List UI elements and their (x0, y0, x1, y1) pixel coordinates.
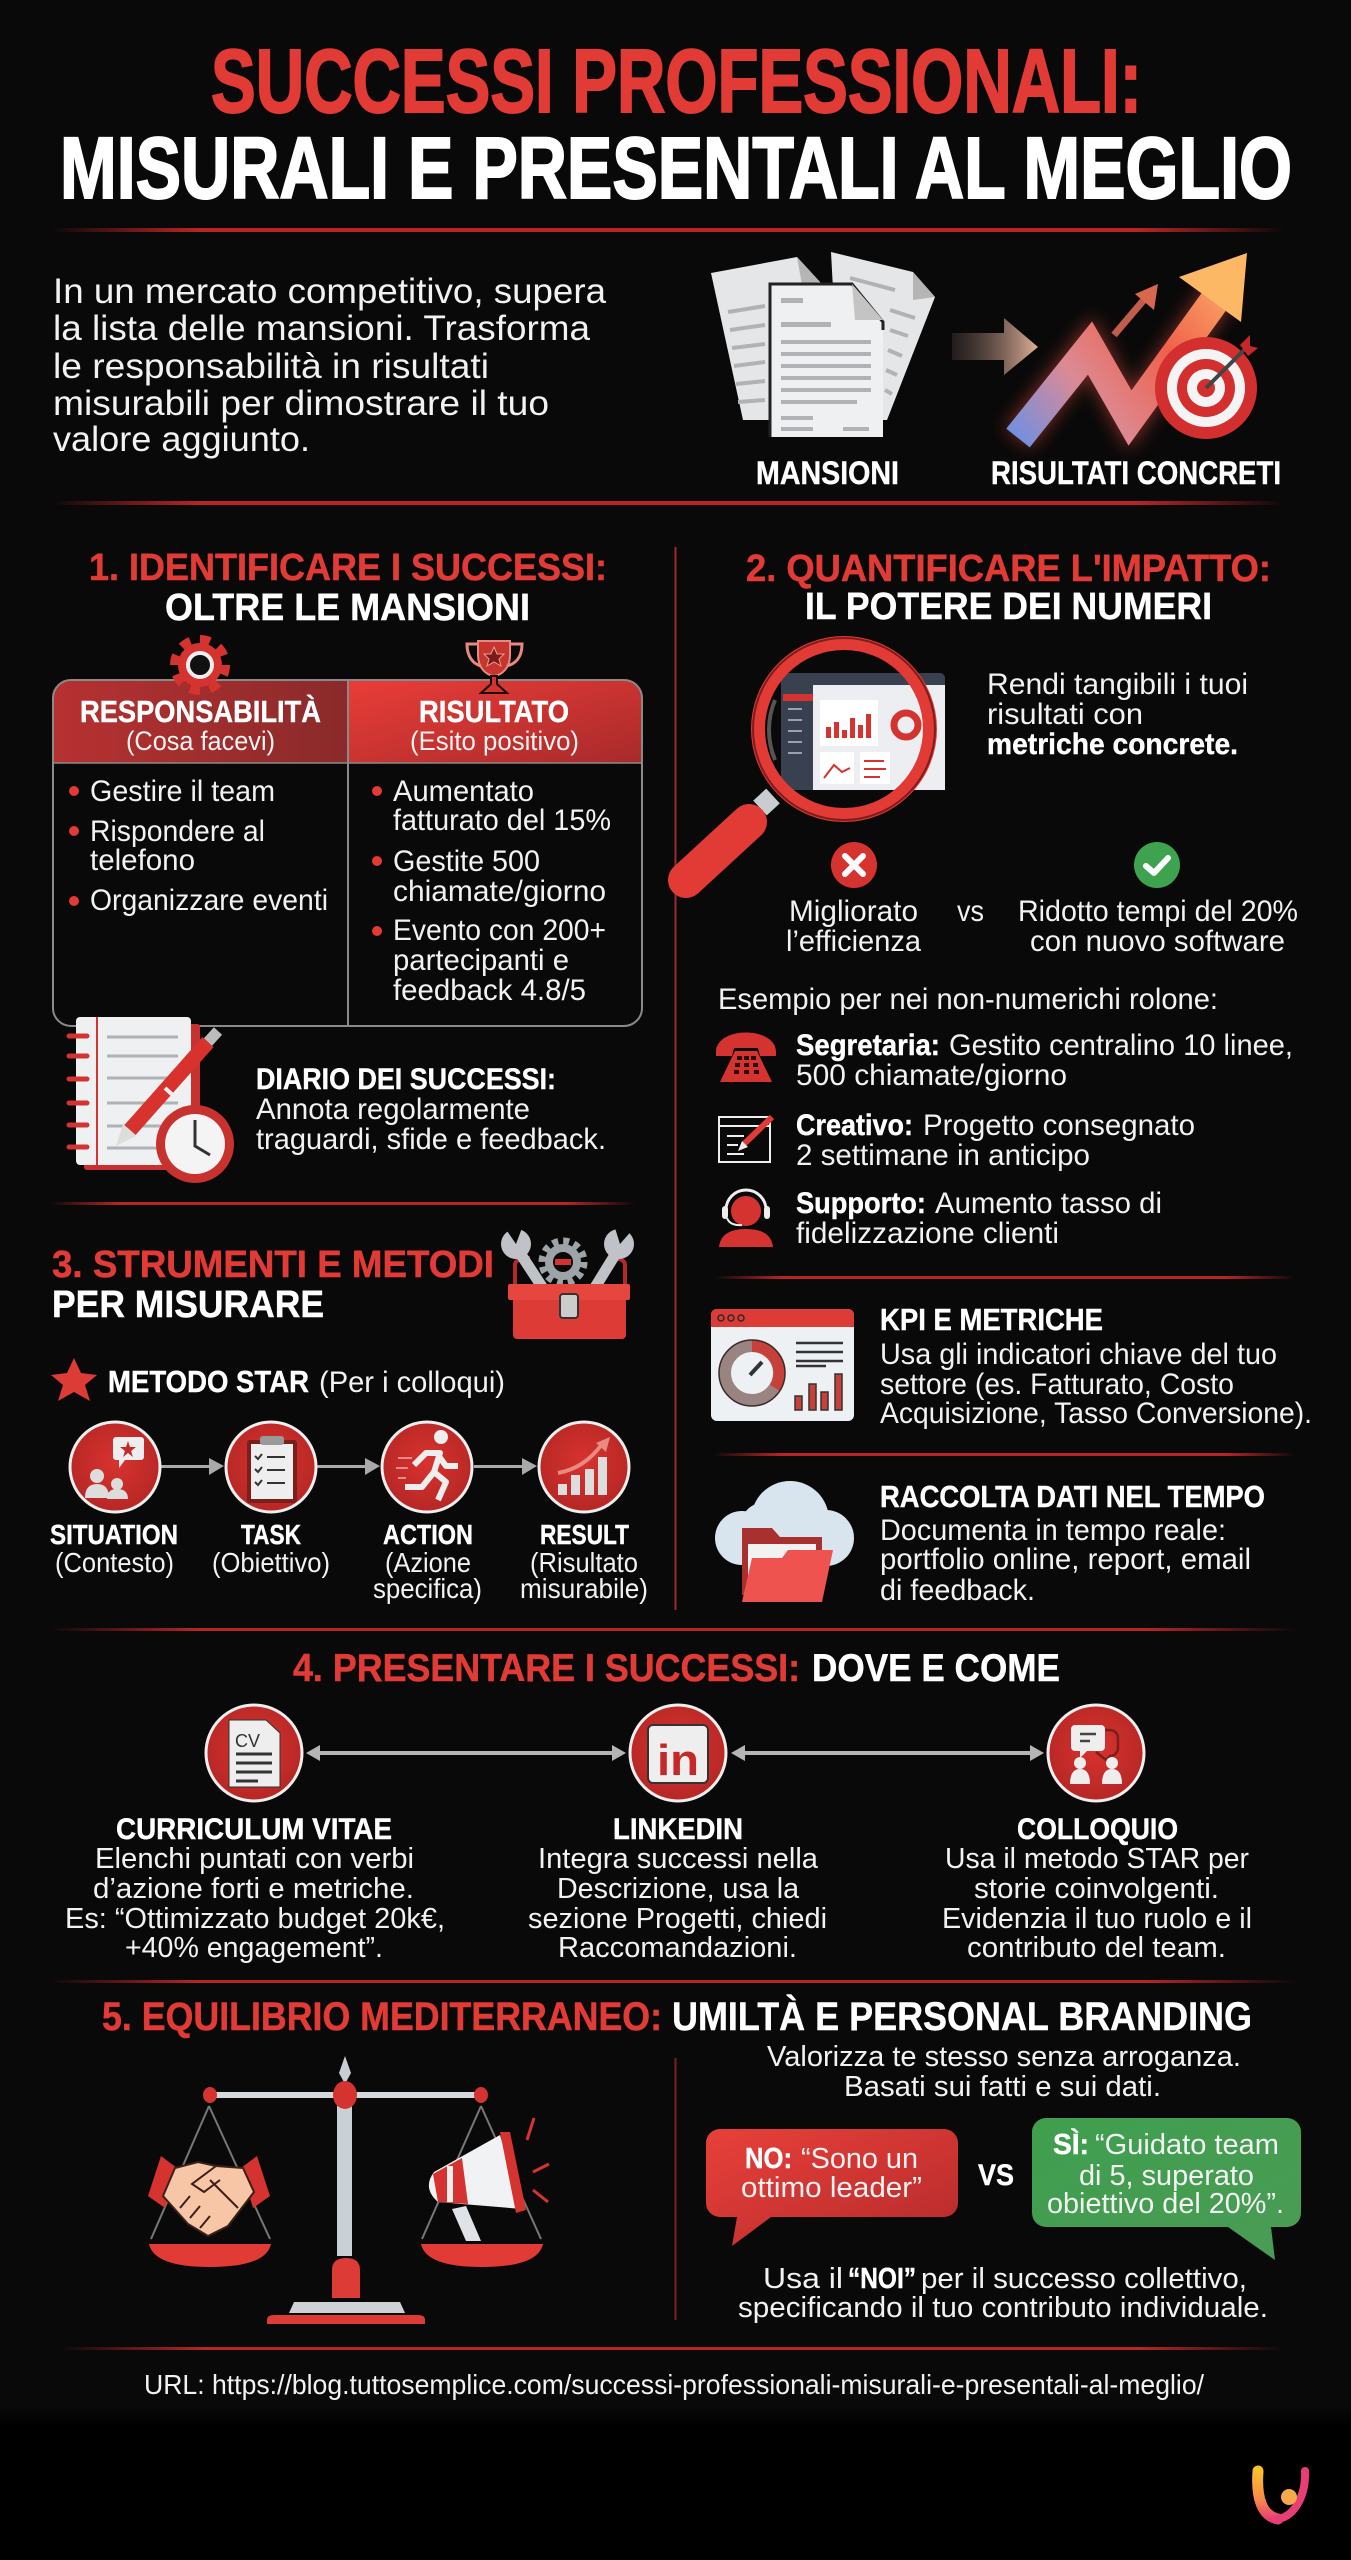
heading: section 3: PER MISURARE (52, 1284, 324, 1326)
text: creativo (796, 1109, 1195, 1172)
callout: NO example: ottimo leader” (741, 2172, 922, 2204)
text: segretaria: 500 chiamate/giorno (796, 1059, 1067, 1092)
step: action (382, 1422, 472, 1512)
arrow: from duties to results (952, 318, 1038, 375)
labels: STAR steps: ACTION (383, 1519, 473, 1550)
text: colloquio: Usa il metodo STAR per (945, 1843, 1249, 1875)
icon: magnifier on dashboard (686, 638, 945, 880)
text: rendi tangibili: Rendi tangibili i tuoi (987, 668, 1248, 701)
comparison: bad vs good example: Migliorato (789, 895, 918, 928)
table: responsabilità vs risultato: telefono (90, 844, 195, 877)
labels: STAR steps: TASK (241, 1519, 301, 1550)
step: situation (70, 1422, 160, 1512)
icon: logo (1258, 2471, 1305, 2519)
icon: creative window with pen (719, 1117, 772, 1162)
text: KPI e metriche: Usa gli indicatori chiave del tuo (880, 1338, 1277, 1371)
text: usa il noi: specificando il tuo contributo individuale. (738, 2292, 1268, 2324)
text: creativo: 2 settimane in anticipo (796, 1139, 1090, 1172)
text: colloquio (942, 1813, 1252, 1964)
text: linkedin: sezione Progetti, chiedi (528, 1903, 827, 1935)
icon: cloud and folder (715, 1481, 854, 1602)
panel: section 3 (50, 1228, 648, 1604)
icon: telephone (716, 1032, 776, 1082)
panel: section 4 (65, 1647, 1252, 1964)
callout: SI example (1032, 2118, 1301, 2260)
arrows: STAR flow (161, 1458, 537, 1475)
heading: section 1 (89, 547, 607, 629)
text: diario dei successi (256, 1063, 606, 1156)
callout: NO example: NO: (745, 2143, 792, 2175)
comparison: bad vs good example: l’efficienza (786, 925, 921, 958)
text: rendi tangibili (987, 668, 1248, 761)
heading: section 1: 1. IDENTIFICARE I SUCCESSI: (89, 547, 607, 589)
icon: success diary notebook with pen and clock (69, 1017, 234, 1183)
label: risultati concreti: RISULTATI CONCRETI (991, 455, 1281, 491)
table: responsabilità vs risultato: chiamate/giorno (393, 875, 606, 908)
labels: STAR steps: (Contesto) (55, 1547, 174, 1578)
text: diario dei successi: DIARIO DEI SUCCESSI: (256, 1063, 556, 1096)
icon: handshake (148, 2156, 270, 2236)
table: responsabilità vs risultato: (Cosa facevi) (126, 726, 275, 756)
heading: section 5 (102, 1994, 1252, 2039)
icon: CV (206, 1705, 302, 1801)
labels: STAR steps: misurabile) (520, 1573, 648, 1604)
step: result (539, 1422, 629, 1512)
text: linkedin: Integra successi nella (538, 1843, 819, 1875)
heading: section 4: 4. PRESENTARE I SUCCESSI: (293, 1647, 800, 1690)
table: responsabilità vs risultato: Gestire il team (90, 775, 275, 808)
icon: interview (1048, 1705, 1144, 1801)
callout: SI example: SÌ: (1053, 2127, 1089, 2161)
text: raccolta dati: Documenta in tempo reale: (880, 1514, 1226, 1547)
text: rendi tangibili: risultati con (987, 698, 1143, 731)
table: responsabilità vs risultato: Rispondere al (90, 815, 265, 848)
labels: STAR steps: specifica) (373, 1573, 482, 1604)
icon: green check (1134, 842, 1180, 888)
table: responsabilità vs risultato: Organizzare eventi (90, 884, 328, 917)
text: raccolta dati: RACCOLTA DATI NEL TEMPO (880, 1479, 1265, 1514)
text: segretaria: Gestito centralino 10 linee, (949, 1029, 1293, 1062)
heading: section 3: 3. STRUMENTI E METODI (52, 1244, 494, 1286)
heading: section 1: OLTRE LE MANSIONI (165, 587, 530, 629)
icon: red cross (831, 842, 877, 888)
icon: balance scale (149, 2056, 543, 2324)
heading: section 3 (52, 1244, 494, 1326)
text: segretaria (796, 1029, 1293, 1092)
icon: growth arrow and target (1018, 253, 1258, 439)
text: curriculum vitae: CURRICULUM VITAE (116, 1813, 392, 1846)
text: valorizza: Basati sui fatti e sui dati. (844, 2071, 1161, 2103)
text: supporto: fidelizzazione clienti (796, 1217, 1059, 1250)
text: raccolta dati: portfolio online, report, email (880, 1543, 1251, 1576)
comparison: bad vs good example: con nuovo software (1030, 925, 1285, 958)
heading: metodo STAR: (Per i colloqui) (319, 1366, 505, 1399)
text: usa il noi (738, 2263, 1268, 2324)
icon: megaphone (429, 2118, 549, 2241)
text: supporto (796, 1187, 1162, 1250)
text: rendi tangibili: metriche concrete. (987, 728, 1238, 761)
table: responsabilità vs risultato: Aumentato (393, 775, 534, 808)
text: colloquio: contributo del team. (967, 1932, 1226, 1964)
callout: SI example: “Guidato team (1095, 2129, 1279, 2161)
text: creativo: Creativo: (796, 1109, 913, 1142)
heading: section 2 (746, 548, 1271, 628)
icon: toolbox with wrenches (501, 1228, 634, 1339)
labels: STAR steps: (Azione (385, 1547, 471, 1578)
intro text: In un mercato competitivo, supera (53, 272, 607, 311)
callout: SI example: obiettivo del 20%”. (1047, 2188, 1284, 2220)
heading: metodo STAR: METODO STAR (108, 1364, 309, 1399)
panel: section 2 (686, 548, 1312, 1607)
source URL: URL: https://blog.tuttosemplice.com/successi-professionali-misurali-e-presentali-al-meglio/ (144, 2369, 1204, 2400)
callout: NO example: “Sono un (801, 2143, 918, 2175)
text: supporto: Supporto: (796, 1187, 926, 1220)
text: linkedin (528, 1813, 827, 1964)
step: task (226, 1422, 316, 1512)
intro text: la lista delle mansioni. Trasforma (53, 309, 591, 348)
labels: STAR steps: (Obiettivo) (212, 1547, 330, 1578)
label: mansioni: MANSIONI (756, 455, 899, 491)
table: responsabilità vs risultato: feedback 4.8/5 (393, 974, 586, 1007)
text: curriculum vitae: +40% engagement”. (125, 1932, 383, 1964)
intro text: valore aggiunto. (53, 420, 310, 459)
heading: metodo STAR (108, 1364, 505, 1399)
text: curriculum vitae: Elenchi puntati con verbi (95, 1843, 414, 1875)
table: responsabilità vs risultato: (Esito positivo) (410, 726, 579, 756)
table: responsabilità vs risultato: fatturato del 15% (393, 804, 611, 837)
icon: trophy (467, 641, 522, 693)
text: colloquio: Evidenzia il tuo ruolo e il (942, 1903, 1252, 1935)
heading: section 5: UMILTÀ E PERSONAL BRANDING (672, 1994, 1252, 2039)
heading: section 5: 5. EQUILIBRIO MEDITERRANEO: (102, 1995, 662, 2039)
icon: CV: CV (235, 1731, 260, 1751)
text: raccolta dati: di feedback. (880, 1574, 1035, 1607)
text: diario dei successi: Annota regolarmente (256, 1093, 530, 1126)
text: KPI e metriche (880, 1302, 1312, 1430)
intro text (53, 272, 607, 459)
label: vs: VS (978, 2159, 1014, 2192)
heading: section 4: DOVE E COME (812, 1647, 1060, 1690)
text: usa il noi: per il successo collettivo, (921, 2263, 1247, 2295)
labels: STAR steps: SITUATION (50, 1519, 178, 1550)
table: responsabilità vs risultato: RISULTATO (419, 694, 569, 729)
heading: section 2: 2. QUANTIFICARE L'IMPATTO: (746, 548, 1271, 590)
text: linkedin: LINKEDIN (613, 1813, 743, 1846)
text: raccolta dati (880, 1479, 1265, 1607)
comparison: bad vs good example: vs (957, 895, 984, 928)
heading: section 2: IL POTERE DEI NUMERI (805, 586, 1212, 628)
text: KPI e metriche: KPI E METRICHE (880, 1302, 1103, 1337)
text: segretaria: Segretaria: (796, 1029, 940, 1062)
text: esempio ruoli: Esempio per nei non-numerichi rolone: (718, 983, 1218, 1016)
text: linkedin: Descrizione, usa la (557, 1873, 800, 1905)
panel: section 1 (53, 547, 642, 1183)
text: curriculum vitae (65, 1813, 445, 1964)
labels: STAR steps: (Risultato (530, 1547, 638, 1578)
arrows: connections between channels (306, 1745, 1044, 1761)
table: responsabilità vs risultato: Gestite 500 (393, 845, 540, 878)
table: responsabilità vs risultato (53, 680, 642, 1026)
intro text: le responsabilità in risultati (53, 347, 489, 386)
table: responsabilità vs risultato: partecipanti e (393, 944, 569, 977)
comparison: bad vs good example (786, 895, 1298, 958)
icon: KPI dashboard window (711, 1309, 854, 1421)
intro text: misurabili per dimostrare il tuo (53, 384, 549, 423)
icon: support headset person (719, 1190, 773, 1247)
icon: gear (175, 640, 225, 690)
text: creativo: Progetto consegnato (923, 1109, 1195, 1142)
labels: STAR steps (50, 1519, 648, 1604)
text: supporto: Aumento tasso di (935, 1187, 1162, 1220)
table: responsabilità vs risultato: Evento con 200+ (393, 914, 606, 947)
comparison: bad vs good example: Ridotto tempi del 20% (1018, 895, 1298, 928)
text: usa il noi: Usa il (763, 2263, 843, 2295)
text: colloquio: COLLOQUIO (1017, 1813, 1178, 1846)
panel: section 5 (102, 1994, 1301, 2324)
text: usa il noi: “NOI” (848, 2263, 916, 2295)
title (60, 32, 1292, 217)
labels: STAR steps: RESULT (540, 1519, 629, 1550)
text: valorizza: Valorizza te stesso senza arroganza. (767, 2041, 1241, 2073)
icon: star (51, 1358, 97, 1401)
callout: SI example: di 5, superato (1079, 2160, 1254, 2192)
text: KPI e metriche: settore (es. Fatturato, Costo (880, 1368, 1234, 1401)
icon: stack of documents (711, 252, 935, 437)
text: curriculum vitae: Es: “Ottimizzato budget 20k€, (65, 1903, 445, 1935)
table: responsabilità vs risultato: RESPONSABILITÀ (80, 694, 321, 729)
text: KPI e metriche: Acquisizione, Tasso Conversione). (880, 1397, 1312, 1430)
icon: LinkedIn: in (657, 1736, 699, 1785)
text: diario dei successi: traguardi, sfide e feedback. (256, 1123, 606, 1156)
text: colloquio: storie coinvolgenti. (974, 1873, 1219, 1905)
callout: NO example (706, 2129, 958, 2246)
icon: LinkedIn (630, 1705, 726, 1801)
text: curriculum vitae: d’azione forti e metriche. (93, 1873, 414, 1905)
text: valorizza (767, 2041, 1241, 2103)
text: linkedin: Raccomandazioni. (558, 1932, 797, 1964)
